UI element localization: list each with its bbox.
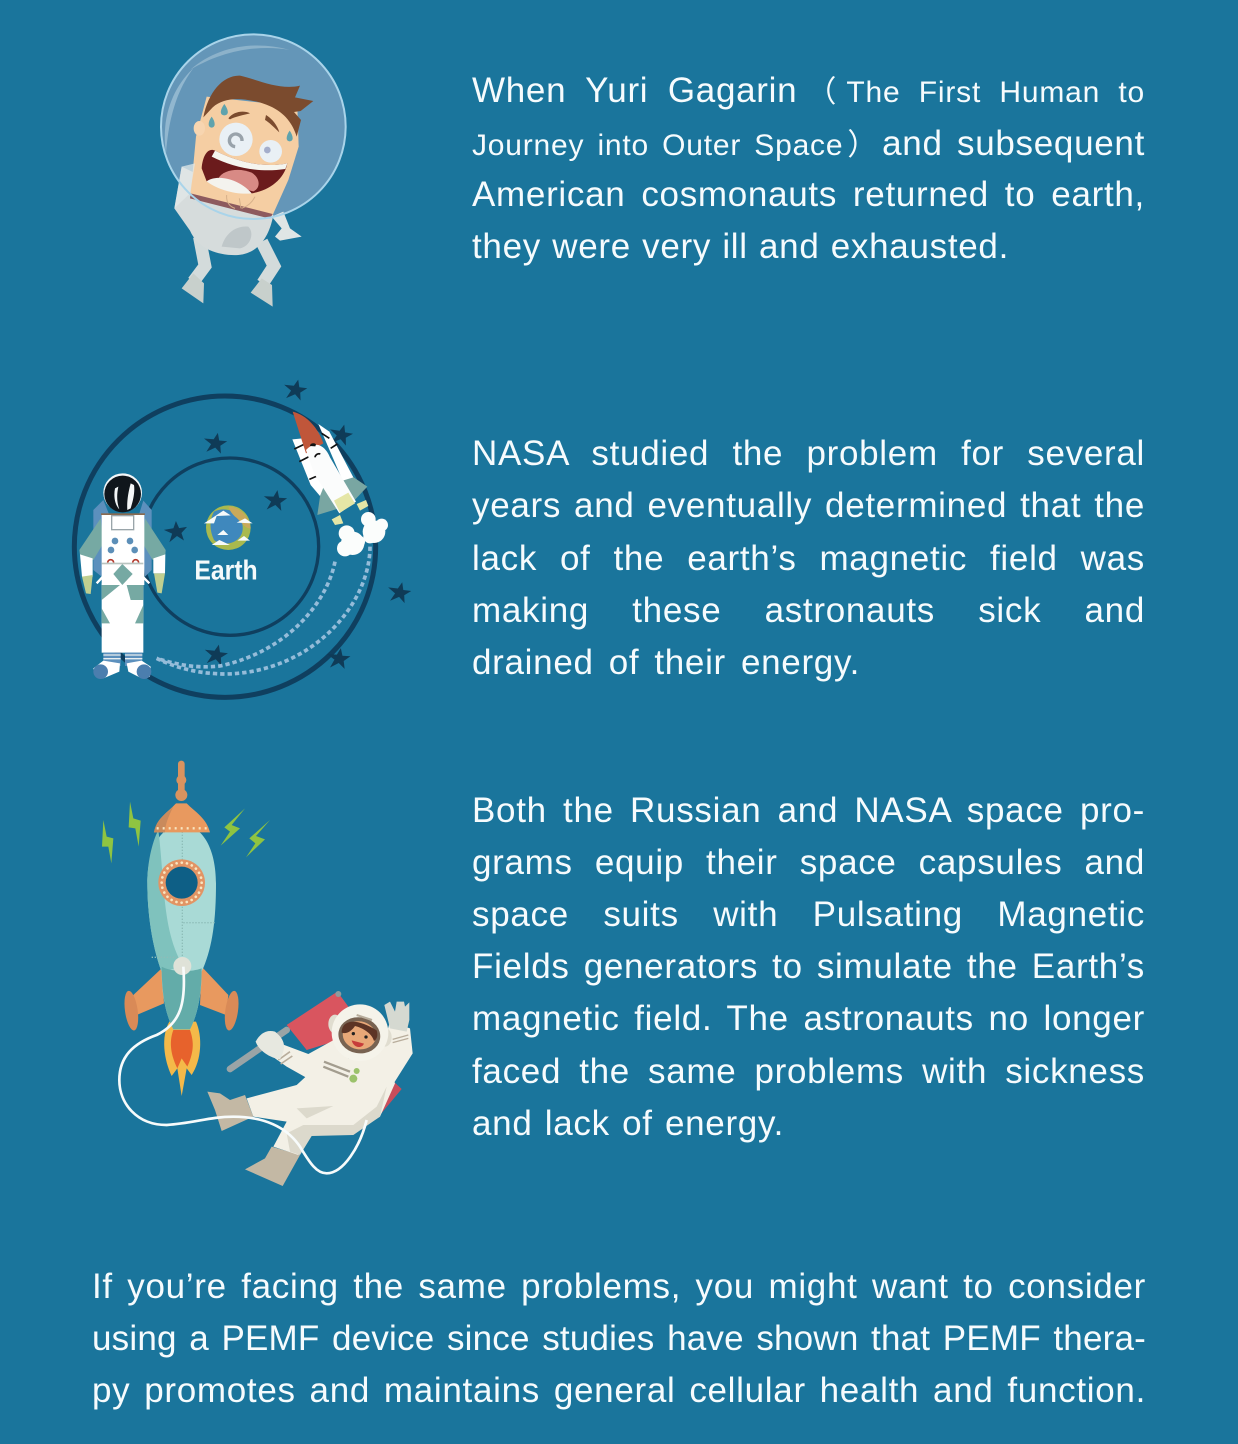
text block: PEMF generators: and lack of energy. [472, 1104, 784, 1143]
text block: PEMF generators: grams equip their space capsules and [472, 843, 1145, 882]
text block: PEMF generators: faced the same problems with sickness [472, 1052, 1145, 1091]
lower hull [162, 967, 202, 1029]
suit belly patch [222, 226, 251, 248]
outer orbit [74, 396, 376, 697]
inner orbit [141, 458, 319, 635]
spacewalker helmet and face [328, 1004, 392, 1061]
fins [122, 967, 241, 1031]
big pupil [228, 132, 244, 148]
spacewalker suit [247, 1002, 413, 1155]
illustration: panicked astronaut in helmet [160, 33, 347, 307]
suit body [174, 167, 273, 255]
spacewalker boots [207, 1092, 300, 1186]
flame [164, 1022, 200, 1096]
small eye [259, 140, 282, 163]
sweat drops [209, 104, 293, 141]
dotted trajectories [157, 547, 370, 674]
lightning bolts [102, 802, 270, 863]
space shuttle [292, 412, 368, 525]
closing text block [92, 1267, 1146, 1410]
hull shade [147, 830, 183, 972]
closing text block: py promotes and maintains general cellular health and function. [92, 1371, 1146, 1410]
panel seams [152, 832, 215, 957]
text block: Gagarin: they were very ill and exhausted. [472, 227, 1009, 266]
text block: Gagarin: American cosmonauts returned to earth, [472, 175, 1145, 214]
ear [194, 121, 205, 136]
flag [230, 991, 402, 1115]
small pupil [264, 147, 271, 153]
cable connector [173, 957, 191, 975]
helmet glass and rim [161, 34, 346, 219]
text block: PEMF generators: Both the Russian and NASA space pro- [472, 791, 1145, 830]
big eye [219, 123, 253, 156]
glove [272, 212, 302, 241]
astronaut standing [79, 473, 166, 679]
text block: NASA study: making these astronauts sick and [472, 591, 1145, 630]
closing text block: using a PEMF device since studies have shown that PEMF thera- [92, 1319, 1146, 1358]
earth [204, 505, 253, 550]
illustration: earth orbit scene [72, 380, 411, 700]
hair [203, 76, 313, 137]
text block: NASA study [472, 434, 1145, 682]
porthole [158, 859, 205, 906]
text block: Gagarin: When Yuri Gagarin（The First Human to [472, 71, 1145, 110]
text block: NASA study: drained of their energy. [472, 643, 860, 682]
head [191, 97, 299, 215]
closing text block: If you’re facing the same problems, you might want to consider [92, 1267, 1146, 1306]
lower teeth [207, 178, 252, 194]
tether cable [119, 967, 367, 1173]
text block: PEMF generators: space suits with Pulsating Magnetic [472, 895, 1145, 934]
rocket hull [147, 825, 216, 1029]
text block: Gagarin [472, 71, 1145, 266]
illustration: rocket and spacewalking astronaut [102, 760, 413, 1186]
eyebrows [228, 112, 279, 132]
upper teeth [212, 151, 287, 170]
engine smoke [337, 512, 388, 556]
chest lines [227, 195, 255, 208]
text block: PEMF generators: Fields generators to simulate the Earth’s [472, 947, 1145, 986]
text block: Gagarin: Journey into Outer Space）and subsequent [472, 124, 1145, 163]
stars [163, 377, 413, 670]
text block: NASA study: lack of the earth’s magnetic field was [472, 539, 1145, 578]
mouth [202, 150, 287, 193]
text block: PEMF generators [472, 791, 1145, 1143]
legs and boots [182, 237, 274, 307]
helmet back [161, 34, 346, 219]
tongue [218, 170, 259, 191]
text block: NASA study: NASA studied the problem for several [472, 434, 1145, 473]
text block: PEMF generators: magnetic field. The astronauts no longer [472, 999, 1145, 1038]
text block: NASA study: years and eventually determined that the [472, 486, 1145, 525]
antenna [175, 761, 187, 801]
nose cone [154, 803, 210, 832]
collar [190, 193, 273, 219]
label: Earth: Earth [194, 554, 258, 585]
